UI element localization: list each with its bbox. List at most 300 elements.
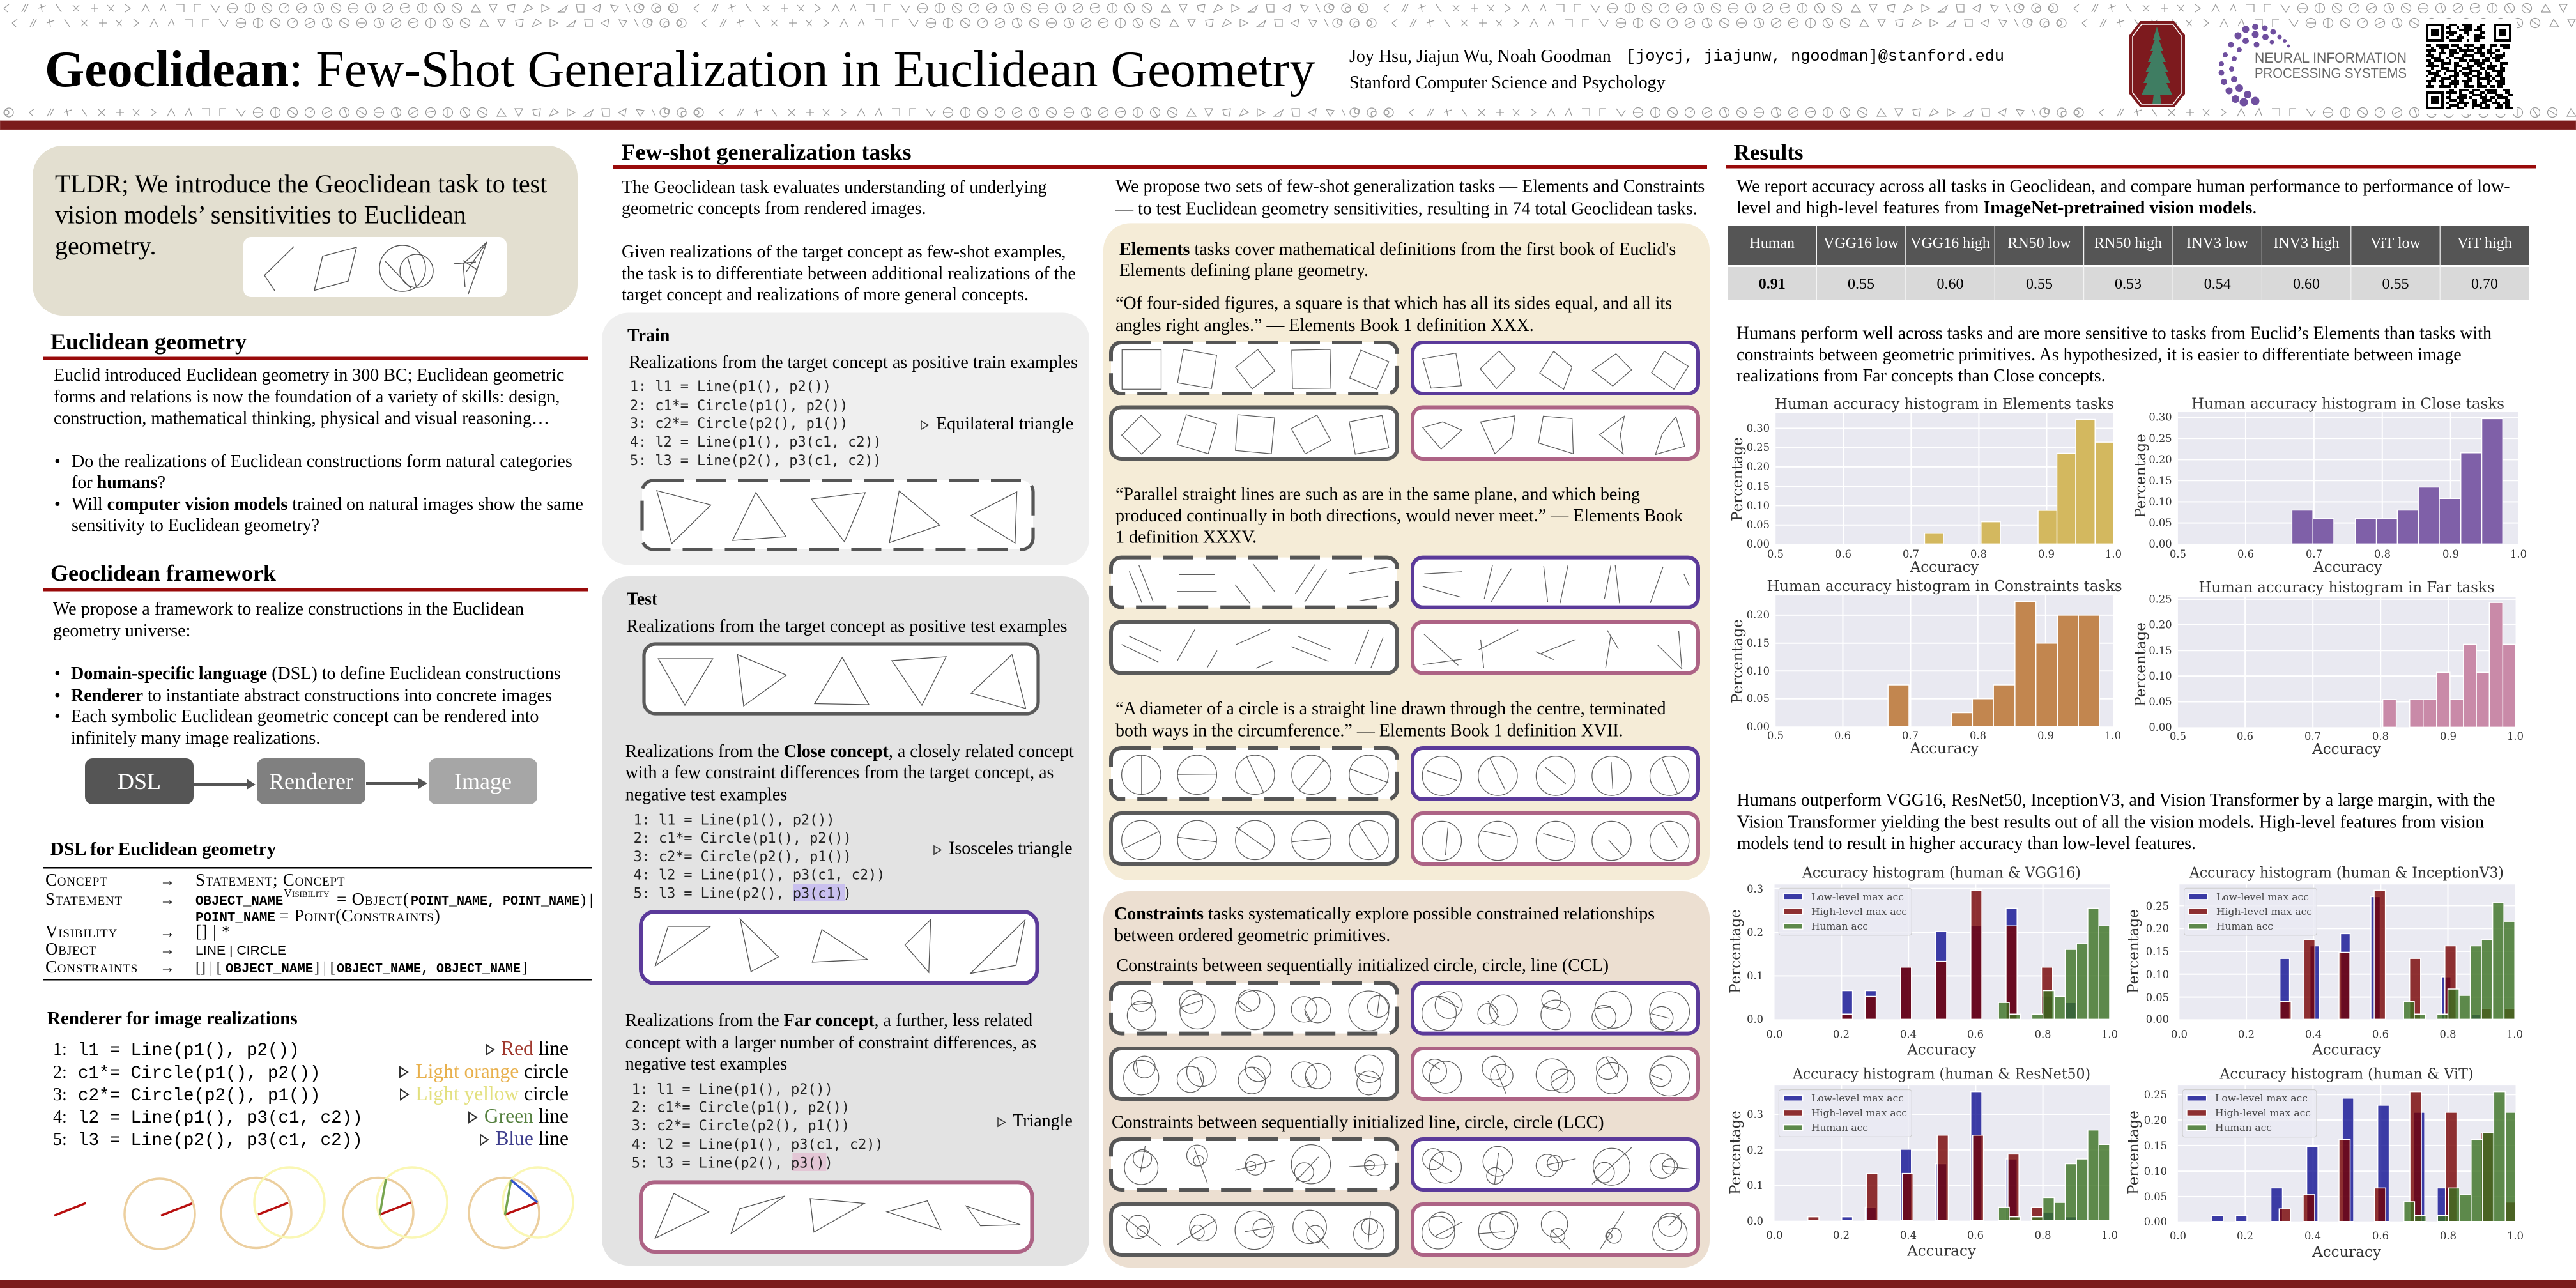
panel: Train xyxy=(602,313,1089,565)
chart: Far histogram: 0.7 xyxy=(2304,730,2321,742)
renderer code: 3: xyxy=(53,1085,67,1105)
framework bullets: Domain-specific language (DSL) to define Euclidean constructions xyxy=(71,664,561,684)
chart: Far histogram: 0.9 xyxy=(2440,730,2457,742)
Constraints description: between ordered geometric primitives. xyxy=(1114,926,1390,946)
framework bullets: • xyxy=(54,707,61,726)
results table: VGG16 high xyxy=(1910,235,1990,252)
quote: diameter: “A diameter of a circle is a straight line drawn through the centre, terminated xyxy=(1116,699,1666,719)
header rule xyxy=(0,121,2576,130)
task intro: geometric concepts from rendered images. xyxy=(622,199,926,218)
chart: Far histogram: 1.0 xyxy=(2507,730,2524,742)
chart: Far histogram: Percentage xyxy=(2133,622,2149,707)
LCC subtitle: Constraints between sequentially initialized line, circle, circle (LCC) xyxy=(1112,1113,1604,1132)
renderer code: c2*= Circle(p2(), p1()) xyxy=(78,1086,321,1106)
chart: Close histogram: 0.20 xyxy=(2149,454,2172,466)
axis labels: 0.6 xyxy=(2372,1230,2389,1242)
chart: human and InceptionV3: Accuracy histogram (human & InceptionV3) xyxy=(2189,865,2504,882)
Constraints description: Constraints tasks systematically explore possible constrained relationships xyxy=(1114,904,1655,924)
axis labels: 0.00 xyxy=(2144,1216,2167,1228)
axis labels: 0.6 xyxy=(1967,1029,1984,1040)
grammar table: → xyxy=(160,942,175,958)
close concept text: with a few constraint differences from the target concept, as xyxy=(625,763,1054,783)
flow diagram xyxy=(85,758,537,804)
axis labels: 0.0 xyxy=(2171,1029,2188,1040)
task intro: the task is to differentiate between additional realizations of the xyxy=(622,264,1076,284)
axis labels: 0.0 xyxy=(1767,1029,1782,1040)
logo: NeurIPS xyxy=(2218,24,2407,106)
quote: parallel lines: produced continually in both directions, would never meet.” — Elements Book xyxy=(1116,506,1683,526)
axis labels: 0.1 xyxy=(1747,970,1763,982)
grammar table: POINT_NAME, POINT_NAME xyxy=(411,894,579,909)
heading: Results xyxy=(1734,140,1804,165)
axis labels: 0.6 xyxy=(1967,1229,1984,1241)
heading: Test xyxy=(627,589,658,610)
axis labels: Percentage xyxy=(1728,909,1744,993)
intro text: construction, mathematical thinking, physical and visual reasoning… xyxy=(54,409,549,428)
results table: Human xyxy=(1749,235,1795,252)
axis labels: 0.05 xyxy=(2146,992,2169,1004)
chart: Constraints histogram: 0.20 xyxy=(1747,609,1770,621)
axis labels: 0.20 xyxy=(2146,923,2169,935)
TLDR text: TLDR; We introduce the Geoclidean task to test xyxy=(55,169,547,198)
axis labels: 0.2 xyxy=(1833,1229,1850,1241)
axis labels: 0.2 xyxy=(2238,1029,2255,1040)
axis labels: 0.3 xyxy=(1747,883,1763,895)
chart: Constraints histogram: 0.7 xyxy=(1902,730,1919,742)
heading rule xyxy=(613,165,1707,169)
results table: 0.60 xyxy=(1937,276,1964,293)
grammar table: → xyxy=(160,873,175,889)
axis labels xyxy=(2126,1089,2524,1261)
axis labels: 0.4 xyxy=(1900,1029,1917,1040)
arrow xyxy=(194,779,256,790)
results table: RN50 low xyxy=(2007,235,2071,252)
far concept text: Realizations from the Far concept, a further, less related xyxy=(625,1011,1032,1031)
chart: human and ResNet50: Accuracy histogram (human & ResNet50) xyxy=(1792,1066,2090,1082)
code: 2: c1*= Circle(p1(), p2()) xyxy=(630,398,848,414)
axis labels xyxy=(1728,1108,2118,1260)
renderer code: 2: xyxy=(53,1062,67,1082)
chart: Constraints histogram xyxy=(1729,578,2122,757)
results table: 0.55 xyxy=(1848,276,1874,293)
results table: VGG16 low xyxy=(1823,235,1899,252)
far concept text xyxy=(625,1011,1036,1074)
results table: ViT high xyxy=(2457,235,2512,252)
description: Realizations from the target concept as positive test examples xyxy=(627,617,1068,636)
renderer annotations: Light yellow circle xyxy=(415,1082,569,1105)
vision model text: Humans outperform VGG16, ResNet50, InceptionV3, and Vision Transformer by a large margin, with the xyxy=(1737,790,2495,810)
description: Realizations from the target concept as positive train examples xyxy=(629,353,1078,372)
title: Geoclidean: Few-Shot Generalization in Euclidean Geometry xyxy=(45,42,1315,98)
human results text: Humans perform well across tasks and are more sensitive to tasks from Euclid’s Elements than tasks with xyxy=(1736,324,2492,344)
chart: Close histogram: 0.6 xyxy=(2237,548,2254,560)
axis labels: 0.25 xyxy=(2146,900,2169,912)
chart: Elements histogram: 0.25 xyxy=(1747,441,1770,454)
code: 5: l3 = Line(p2(), p3(c1, c2)) xyxy=(630,453,882,469)
heading: Few-shot generalization tasks xyxy=(621,139,911,165)
QR code xyxy=(2421,19,2517,114)
human results text xyxy=(1736,324,2492,386)
Image box xyxy=(429,758,537,804)
close concept code: 3: c2*= Circle(p2(), p1()) xyxy=(634,849,852,865)
results intro: level and high-level features from ImageNet-pretrained vision models. xyxy=(1736,198,2257,218)
chart: Elements histogram: 0.10 xyxy=(1747,500,1770,512)
results table: INV3 low xyxy=(2186,235,2249,252)
grammar table: Concept xyxy=(45,870,108,889)
chart: Constraints histogram: 0.5 xyxy=(1767,730,1784,742)
construction sequence xyxy=(54,1167,573,1249)
annotation: Equilateral triangle xyxy=(936,414,1073,434)
renderer annotations: Green line xyxy=(484,1105,569,1127)
far concept code: 1: l1 = Line(p1(), p2()) xyxy=(632,1082,833,1098)
example boxes: LCC xyxy=(1111,1139,1698,1255)
axis labels: 0.10 xyxy=(2144,1165,2167,1177)
axis labels: Percentage xyxy=(1728,1110,1744,1195)
renderer annotations: Red line xyxy=(501,1037,569,1059)
logo wordmark: NEURAL INFORMATION xyxy=(2255,50,2407,66)
TLDR text: geometry. xyxy=(55,231,156,260)
framework bullets: • xyxy=(54,664,61,684)
grammar table: = Point(Constraints) xyxy=(279,906,441,925)
authors: [joycj, jiajunw, ngoodman]@stanford.edu xyxy=(1626,47,2004,66)
results table: ViT low xyxy=(2370,235,2421,252)
legend: High-level max acc xyxy=(1811,906,1907,917)
chart: Far histogram: 0.10 xyxy=(2149,670,2172,682)
axis labels: 0.25 xyxy=(2144,1089,2167,1101)
axis labels xyxy=(1728,883,2118,1059)
legend: High-level max acc xyxy=(1811,1107,1907,1119)
research questions: Will computer vision models trained on natural images show the same xyxy=(72,494,583,514)
axis labels: 0.4 xyxy=(2304,1230,2321,1242)
panel: Elements xyxy=(1103,223,1710,880)
chart: Elements histogram: 0.30 xyxy=(1747,422,1770,434)
chart: Constraints histogram: Human accuracy histogram in Constraints tasks xyxy=(1767,578,2122,595)
authors: Joy Hsu, Jiajun Wu, Noah Goodman xyxy=(1349,47,1611,66)
grammar table: → xyxy=(160,960,175,976)
renderer code: l3 = Line(p2(), p3(c1, c2)) xyxy=(78,1131,363,1151)
logo: Stanford xyxy=(2129,21,2185,107)
axis labels: 0.0 xyxy=(2170,1230,2186,1242)
axis labels: 0.6 xyxy=(2372,1029,2389,1040)
code: 1: l1 = Line(p1(), p2()) xyxy=(630,379,831,395)
section: Renderer xyxy=(47,1008,573,1249)
section: Few-shot generalization tasks xyxy=(613,139,1707,305)
legend xyxy=(1811,891,1907,932)
chart: Close histogram: 0.30 xyxy=(2149,411,2172,423)
axis labels: 1.0 xyxy=(2507,1230,2524,1242)
heading rule xyxy=(43,588,588,592)
chart: Elements histogram: 0.20 xyxy=(1747,461,1770,473)
heading: Renderer for image realizations xyxy=(47,1008,298,1029)
renderer annotations: Blue line xyxy=(495,1127,569,1149)
close examples box xyxy=(641,912,1038,983)
quote: square xyxy=(1116,294,1672,335)
legend: Human acc xyxy=(2216,921,2273,932)
close concept code: 2: c1*= Circle(p1(), p2()) xyxy=(634,831,852,847)
chart: Far histogram xyxy=(2133,579,2524,758)
close concept text xyxy=(625,742,1074,805)
results table: 0.55 xyxy=(2382,276,2409,293)
axis labels: 0.0 xyxy=(1747,1215,1763,1227)
section: Results xyxy=(1726,140,2536,386)
TLDR text: vision models’ sensitivities to Euclidean xyxy=(55,201,466,229)
axis labels: 0.8 xyxy=(2035,1029,2051,1040)
renderer code: l1 = Line(p1(), p2()) xyxy=(78,1041,300,1061)
chart: Far histogram: 0.00 xyxy=(2149,721,2172,733)
axis labels: 0.2 xyxy=(1747,1144,1763,1156)
axis labels: 0.05 xyxy=(2144,1191,2167,1203)
section: DSL table xyxy=(43,839,593,980)
framework bullets: Renderer to instantiate abstract constructions into concrete images xyxy=(71,686,552,705)
framework text: We propose a framework to realize constructions in the Euclidean xyxy=(53,599,524,619)
vision model text: Vision Transformer yielding the best results out of all the vision models. High-level features from vision xyxy=(1737,813,2484,832)
close concept text: negative test examples xyxy=(625,785,787,805)
logo wordmark xyxy=(2255,50,2407,81)
Elements description: Elements defining plane geometry. xyxy=(1119,261,1368,280)
panel: Constraints xyxy=(1103,891,1710,1268)
chart: human and ViT xyxy=(2126,1066,2524,1261)
affiliation: Stanford Computer Science and Psychology xyxy=(1349,73,1666,93)
Elements description: Elements tasks cover mathematical definitions from the first book of Euclid's xyxy=(1119,240,1676,259)
chart: Far histogram: 0.05 xyxy=(2149,696,2172,708)
CCL subtitle: Constraints between sequentially initialized circle, circle, line (CCL) xyxy=(1117,956,1609,976)
chart: Close histogram: Percentage xyxy=(2133,434,2149,518)
results table: 0.60 xyxy=(2293,276,2320,293)
axis labels: Accuracy xyxy=(2312,1244,2381,1261)
chart: Elements histogram: Human accuracy histogram in Elements tasks xyxy=(1775,396,2114,413)
chart: Constraints histogram: 0.6 xyxy=(1834,730,1851,742)
chart: Far histogram: Accuracy xyxy=(2312,741,2381,758)
close concept text: Realizations from the Close concept, a closely related concept xyxy=(625,742,1074,762)
panel: Test xyxy=(602,576,1089,1266)
axis labels: 0.2 xyxy=(2237,1230,2253,1242)
chart: Close histogram: 1.0 xyxy=(2510,548,2527,560)
panel: TLDR xyxy=(33,146,578,316)
chart: Close histogram: 0.00 xyxy=(2149,538,2172,550)
chart: Far histogram: 0.6 xyxy=(2237,730,2253,742)
framework bullets xyxy=(54,664,561,748)
grammar table: → xyxy=(160,924,175,941)
chart: Close histogram: 0.5 xyxy=(2170,548,2186,560)
Constraints description xyxy=(1114,904,1655,946)
axis labels xyxy=(2126,900,2523,1059)
heading: Geoclidean framework xyxy=(50,560,276,586)
DSL box xyxy=(85,758,194,804)
header band xyxy=(0,3,2576,130)
chart: Close histogram: Accuracy xyxy=(2313,559,2382,576)
axis labels: 0.15 xyxy=(2146,946,2169,958)
axis labels: 1.0 xyxy=(2101,1029,2118,1040)
footer band xyxy=(0,1280,2576,1288)
code xyxy=(630,379,882,469)
results table: RN50 high xyxy=(2094,235,2162,252)
example boxes: parallel lines xyxy=(1111,558,1698,673)
legend: Human acc xyxy=(2215,1122,2272,1133)
far concept code: 5: l3 = Line(p2(), p3()) xyxy=(632,1155,833,1171)
legend: Low-level max acc xyxy=(2215,1092,2308,1104)
human results text: realizations from Far concepts than Close concepts. xyxy=(1736,366,2106,386)
axis labels: 0.4 xyxy=(2305,1029,2322,1040)
chart: Elements histogram: Accuracy xyxy=(1910,559,1979,576)
results table xyxy=(1728,226,2529,300)
far examples box xyxy=(641,1182,1032,1252)
heading: DSL for Euclidean geometry xyxy=(50,839,277,859)
logo wordmark: PROCESSING SYSTEMS xyxy=(2255,65,2407,81)
grammar table: [] | [ xyxy=(195,960,222,976)
task intro: The Geoclidean task evaluates understanding of underlying xyxy=(622,178,1047,197)
grammar table: OBJECT_NAME xyxy=(226,962,313,977)
quote: diameter xyxy=(1116,699,1666,741)
renderer code: 1: xyxy=(53,1039,67,1059)
legend xyxy=(1811,1092,1907,1133)
legend: Human acc xyxy=(1811,1122,1868,1133)
vision model text: models tend to result in higher accuracy than low-level features. xyxy=(1737,834,2196,854)
legend: Low-level max acc xyxy=(1811,1092,1904,1104)
grammar table: ) | xyxy=(581,892,593,908)
axis labels: 0.1 xyxy=(1747,1179,1763,1192)
chart: Close histogram: 0.10 xyxy=(2149,496,2172,508)
legend: Human acc xyxy=(1811,921,1868,932)
arrow xyxy=(366,778,427,789)
close concept code: 4: l2 = Line(p1(), p3(c1, c2)) xyxy=(634,868,885,884)
framework bullets: • xyxy=(54,686,61,705)
grammar table: Statement xyxy=(45,889,123,908)
axis labels: 1.0 xyxy=(2101,1229,2118,1241)
human results text: constraints between geometric primitives. As hypothesized, it is easier to differentiate between image xyxy=(1736,345,2462,365)
far concept code: 3: c2*= Circle(p2(), p1()) xyxy=(632,1118,850,1134)
grammar table: LINE | CIRCLE xyxy=(195,944,286,958)
renderer annotations xyxy=(400,1037,569,1149)
authors xyxy=(1349,47,2004,66)
heading: Euclidean geometry xyxy=(50,329,247,355)
legend: High-level max acc xyxy=(2215,1107,2311,1119)
axis labels: 0.8 xyxy=(2440,1230,2457,1242)
chart: Elements histogram: 0.9 xyxy=(2038,548,2055,560)
example boxes: CCL xyxy=(1111,983,1698,1099)
chart: Constraints histogram: 0.10 xyxy=(1747,665,1770,677)
grammar table: Visibility xyxy=(284,887,330,900)
axis labels: 0.8 xyxy=(2440,1029,2456,1040)
results intro xyxy=(1736,177,2510,218)
far concept code: 4: l2 = Line(p1(), p3(c1, c2)) xyxy=(632,1137,883,1153)
axis labels: 0.8 xyxy=(2035,1229,2051,1241)
grammar table: Object xyxy=(45,939,96,958)
chart: Constraints histogram: 0.15 xyxy=(1747,637,1770,649)
chart: Far histogram: 0.15 xyxy=(2149,645,2172,657)
quote: square: “Of four-sided figures, a square is that which has all its sides equal, and all its xyxy=(1116,294,1672,313)
chart: Close histogram xyxy=(2133,396,2527,576)
chart: Elements histogram: 1.0 xyxy=(2105,548,2122,560)
axis labels: 0.2 xyxy=(1833,1029,1850,1040)
results table: 0.55 xyxy=(2026,276,2053,293)
far concept code: 2: c1*= Circle(p1(), p2()) xyxy=(632,1100,850,1116)
legend: Low-level max acc xyxy=(2216,891,2309,903)
intro text: forms and relations is now the foundation of a variety of skills: design, xyxy=(54,387,560,407)
close concept code: 1: l1 = Line(p1(), p2()) xyxy=(634,813,835,829)
chart: Far histogram: 0.8 xyxy=(2372,730,2389,742)
task intro xyxy=(622,178,1076,305)
Renderer box: Renderer xyxy=(269,769,353,794)
chart: Close histogram: 0.25 xyxy=(2149,433,2172,445)
quote: parallel lines xyxy=(1116,485,1683,547)
chart: Elements histogram: 0.6 xyxy=(1835,548,1851,560)
code: 3: c2*= Circle(p2(), p1()) xyxy=(630,416,848,432)
example shapes xyxy=(243,237,507,297)
chart: human and InceptionV3 xyxy=(2126,865,2523,1059)
chart: Close histogram: 0.7 xyxy=(2306,548,2322,560)
chart: Elements histogram: 0.7 xyxy=(1903,548,1919,560)
TLDR text xyxy=(55,169,547,260)
task intro: Given realizations of the target concept as few-shot examples, xyxy=(622,242,1066,262)
research questions: sensitivity to Euclidean geometry? xyxy=(72,516,319,535)
grammar table: Visibility xyxy=(45,922,118,941)
legend xyxy=(2215,1092,2311,1133)
chart: Far histogram: 0.5 xyxy=(2170,730,2186,742)
train examples box xyxy=(642,480,1033,549)
quote: square: angles right angles.” — Elements Book 1 definition XXX. xyxy=(1116,316,1534,335)
chart: human and VGG16 xyxy=(1728,865,2118,1059)
legend xyxy=(2216,891,2312,932)
close concept code xyxy=(634,813,885,901)
heading rule xyxy=(43,356,588,360)
Image box: Image xyxy=(454,769,512,794)
axis labels: Percentage xyxy=(2126,909,2142,993)
chart: Constraints histogram: 1.0 xyxy=(2104,730,2121,742)
chart: Far histogram: 0.20 xyxy=(2149,618,2172,631)
task sets intro: We propose two sets of few-shot generalization tasks — Elements and Constraints xyxy=(1116,177,1705,197)
DSL box: DSL xyxy=(118,769,161,794)
results table: INV3 high xyxy=(2273,235,2340,252)
results table: 0.91 xyxy=(1759,276,1786,293)
framework text xyxy=(53,599,524,641)
task sets intro: — to test Euclidean geometry sensitivities, resulting in 74 total Geoclidean tasks. xyxy=(1115,199,1698,218)
code: 4: l2 = Line(p1(), p3(c1, c2)) xyxy=(630,434,882,450)
far concept text: negative test examples xyxy=(625,1054,787,1074)
grammar table: → xyxy=(160,892,175,908)
grammar table: POINT_NAME xyxy=(195,911,275,926)
renderer code: l2 = Line(p1(), p3(c1, c2)) xyxy=(78,1108,363,1128)
heading rule xyxy=(1726,165,2536,169)
far concept code xyxy=(632,1082,883,1171)
chart: Constraints histogram: 0.8 xyxy=(1970,730,1986,742)
grammar table xyxy=(43,867,593,980)
section: Geoclidean framework xyxy=(43,560,588,804)
task intro: target concept and realizations of more general concepts. xyxy=(622,285,1029,305)
research questions: Do the realizations of Euclidean constructions form natural categories xyxy=(72,452,572,471)
chart: Far histogram: Human accuracy histogram in Far tasks xyxy=(2199,579,2494,596)
chart: Constraints histogram: 0.00 xyxy=(1747,721,1770,733)
axis labels: 0.4 xyxy=(1900,1229,1917,1241)
axis labels: 0.0 xyxy=(1767,1229,1782,1241)
axis labels: 0.10 xyxy=(2146,969,2169,981)
quote: diameter: both ways in the circumference.” — Elements Book 1 definition XVII. xyxy=(1116,721,1623,741)
intro text xyxy=(54,365,564,428)
results table: 0.70 xyxy=(2471,276,2498,293)
research questions: • xyxy=(54,452,61,471)
chart: Elements histogram: 0.05 xyxy=(1747,519,1770,531)
example boxes: square xyxy=(1111,342,1698,459)
Elements description xyxy=(1119,240,1676,280)
close concept code: 5: l3 = Line(p2(), p3(c1)) xyxy=(634,885,852,901)
renderer code: 4: xyxy=(53,1107,67,1127)
axis labels: 0.3 xyxy=(1747,1108,1763,1121)
quote: parallel lines: 1 definition XXXV. xyxy=(1116,527,1257,547)
grammar table: ] xyxy=(522,960,527,976)
chart: Close histogram: 0.05 xyxy=(2149,517,2172,529)
axis labels: Percentage xyxy=(2126,1110,2142,1195)
chart: Close histogram: 0.15 xyxy=(2149,475,2172,487)
axis labels: 0.0 xyxy=(1747,1013,1763,1025)
